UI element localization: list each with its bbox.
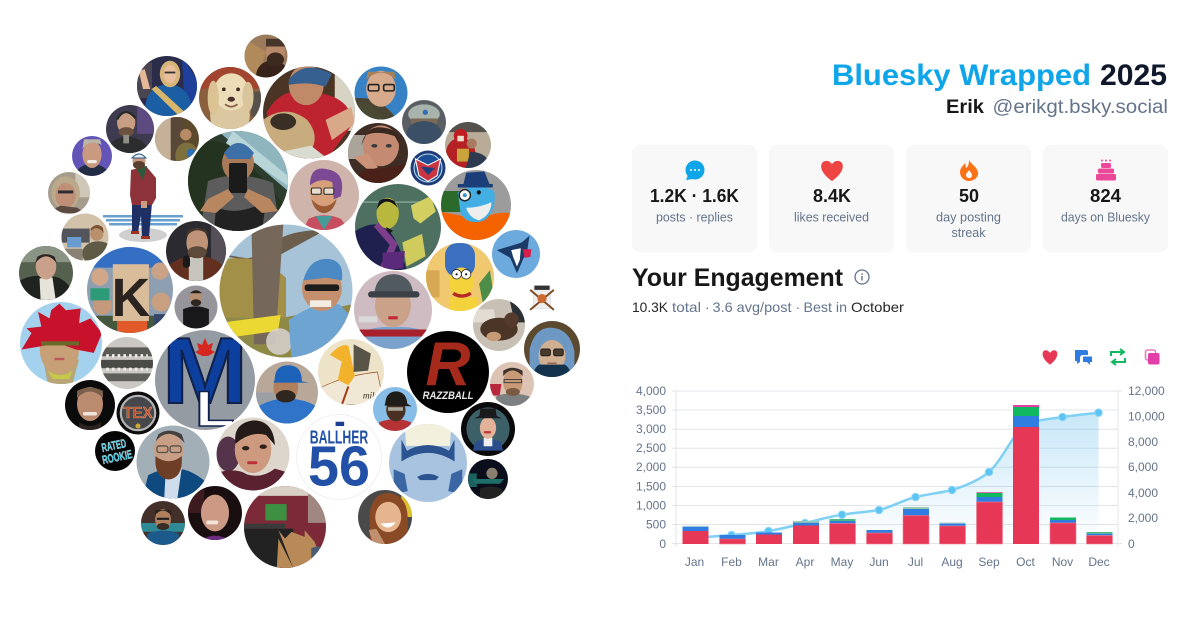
- engagement summary: October: [851, 299, 904, 315]
- avatar: Simpsons Mike baseball card: mike: [363, 390, 380, 400]
- right axis labels: 12,000: [1128, 384, 1165, 398]
- left axis labels: 2,500: [636, 441, 666, 455]
- avatar: Ballher 56 jersey: 56: [308, 435, 370, 498]
- avatar: Razzball logo: RAZZBALL: [423, 390, 473, 402]
- month labels: Dec: [1088, 555, 1110, 569]
- avatar: bald man smiling: [188, 486, 242, 540]
- avatar: woman with hand on cheek: [348, 123, 408, 183]
- avatar: dog watching TV: [244, 486, 326, 568]
- stat card: day posting streak: 50: [959, 186, 979, 206]
- avatar: TEX neon sign: [116, 392, 160, 434]
- heading: Your Engagement: Your Engagement: [632, 264, 844, 292]
- engagement summary: ·: [705, 299, 710, 315]
- avatar: man with cap by tree: [220, 224, 352, 358]
- avatar: man in dark suit: [19, 246, 73, 300]
- avatar: ML maple leaf logo: [155, 330, 255, 430]
- month labels: Mar: [758, 555, 779, 569]
- user name and handle: Erik: [946, 97, 984, 118]
- stat card: day posting streak: [906, 145, 1031, 252]
- avatar: woman with dark hair: [216, 418, 290, 490]
- icon: flame: [960, 160, 978, 181]
- cumulative points: [728, 409, 1102, 539]
- stat card: day posting streak: day posting: [936, 210, 1001, 224]
- engagement summary: ·: [796, 299, 800, 315]
- avatar: bearded man top: [244, 34, 288, 78]
- avatar: cartoon man with purple hair: [289, 160, 359, 230]
- right axis labels: 4,000: [1128, 486, 1158, 500]
- title: Bluesky Wrapped: [832, 59, 1091, 92]
- month labels: Oct: [1016, 555, 1035, 569]
- left axis labels: 0: [659, 537, 666, 551]
- cumulative line: [694, 413, 1098, 538]
- icon: info: [855, 270, 869, 284]
- month labels: Feb: [721, 555, 742, 569]
- avatar: dim portrait with hat: [468, 459, 508, 499]
- icon: chat bubble: [686, 160, 704, 180]
- right axis labels: 6,000: [1128, 460, 1158, 474]
- title: 2025: [1100, 59, 1167, 92]
- bar: Jul: [903, 507, 929, 544]
- avatar: K sign in baseball crowd: [87, 247, 173, 333]
- left axis labels: 2,000: [636, 460, 666, 474]
- right axis labels: 0: [1128, 537, 1135, 551]
- bar: Apr: [793, 521, 819, 544]
- avatar: Rated Rookie logo: [95, 431, 135, 471]
- left axis labels: 3,500: [636, 403, 666, 417]
- right axis labels: 8,000: [1128, 435, 1158, 449]
- month labels: Nov: [1052, 555, 1073, 569]
- avatar: man with glasses and grey sweater: [490, 362, 534, 406]
- grid lines and axes: [672, 391, 1122, 547]
- bar: Jan: [682, 526, 708, 544]
- avatar: Blue Jays logo: [492, 230, 540, 278]
- avatar: man with glasses: [354, 66, 408, 120]
- avatar: whale mascot with Blue Jays cap: [441, 170, 511, 240]
- icon: replies bubbles: [1075, 350, 1092, 365]
- icon: likes heart: [1043, 350, 1057, 365]
- avatar: man in red shirt with pug: [263, 65, 355, 158]
- avatar: K sign in baseball crowd: K: [112, 269, 150, 328]
- user name and handle: @erikgt.bsky.social: [992, 97, 1168, 118]
- avatar: Mary Poppins: [461, 402, 515, 456]
- avatar: man at microphone in brown jacket: [166, 221, 226, 281]
- engagement summary: 3.6 avg/post: [712, 299, 792, 315]
- month labels: Jan: [685, 555, 704, 569]
- avatar: smiling grey-haired man: [72, 136, 112, 176]
- avatar: man in black shirt on grey: [174, 286, 218, 328]
- right axis labels: 2,000: [1128, 511, 1158, 525]
- month labels: [685, 555, 1110, 569]
- illustration: cartoon man in red jacket standing on stripes: [103, 154, 183, 242]
- avatar: Rated Rookie logo: ROOKIE: [101, 447, 133, 467]
- icon: quote squares: [1146, 350, 1160, 364]
- avatar: cartoon woman with long hair: [358, 490, 412, 544]
- stat card: days on Bluesky: 824: [1090, 186, 1121, 206]
- stat card: posts and replies: [632, 145, 757, 252]
- month labels: Apr: [796, 555, 814, 569]
- stat card: posts and replies: posts · replies: [656, 210, 733, 224]
- avatar: masked person with cap: [402, 100, 446, 148]
- avatar: bearded man in blue suit: [136, 426, 210, 498]
- stat card: likes received: 8.4K: [813, 186, 851, 206]
- engagement summary: 10.3K: [632, 299, 669, 315]
- bar: May: [830, 519, 856, 544]
- left axis labels: [636, 384, 666, 551]
- avatar: ML maple leaf logo: L: [195, 381, 235, 437]
- avatar: Marge Simpson: [426, 243, 494, 311]
- avatar: man with glasses in blue scrubs: [141, 501, 185, 545]
- bar: Dec: [1086, 532, 1112, 544]
- avatar: dog on sofa: [473, 299, 525, 351]
- month labels: Aug: [941, 555, 963, 569]
- icon: heart: [821, 161, 843, 181]
- avatar: man with laptop: [62, 214, 108, 260]
- month labels: Jun: [869, 555, 889, 569]
- stat card: likes received: [769, 145, 894, 252]
- right axis labels: 10,000: [1128, 410, 1165, 424]
- icon: repost arrows: [1111, 349, 1125, 365]
- avatar: red mascot and person: [445, 122, 491, 169]
- bar: Mar: [756, 532, 782, 544]
- avatar: headset man: [106, 105, 154, 153]
- avatar bubble cluster: [19, 34, 580, 568]
- bar: Aug: [940, 522, 966, 544]
- stat card: posts and replies: 1.2K · 1.6K: [650, 186, 739, 206]
- bar: Oct: [1013, 405, 1039, 544]
- left axis labels: 4,000: [636, 384, 666, 398]
- right axis labels: [1128, 384, 1165, 551]
- avatar: Ballher 56 jersey: BALLHER: [310, 427, 368, 448]
- avatar: Rated Rookie logo: RATED: [100, 436, 128, 455]
- avatar: woman in blue jersey: [137, 56, 197, 116]
- avatar: TEX neon sign: TEX: [123, 405, 153, 422]
- avatar: bald man on black: [65, 380, 115, 430]
- avatar: white dog: [199, 67, 261, 129]
- avatar: man in camo jacket: [155, 117, 199, 161]
- cumulative area: [694, 413, 1098, 544]
- avatar: Razzball logo: R: [425, 330, 471, 399]
- avatar: ML maple leaf logo: M: [162, 318, 248, 423]
- avatar: green cartoon villain: [355, 184, 441, 270]
- stat card: likes received: likes received: [794, 210, 869, 224]
- month labels: Sep: [978, 555, 1000, 569]
- left axis labels: 1,000: [636, 498, 666, 512]
- avatar: hockey team logo: [410, 150, 446, 186]
- avatar: man with blue cap and hawaiian shirt: [256, 362, 318, 424]
- avatar: red Canadian maple leaf hat: [20, 302, 102, 384]
- avatar: woman with cap: [354, 271, 432, 349]
- engagement summary: total: [672, 299, 701, 315]
- left axis labels: 1,500: [636, 480, 666, 494]
- engagement summary: [632, 299, 904, 315]
- icon: birthday cake: [1096, 160, 1116, 180]
- stacked bars: [682, 405, 1112, 544]
- avatar: selfie man with phone: [188, 131, 288, 231]
- chart: engagement by month, stacked bars and cumulative line: [636, 384, 1165, 569]
- avatar: person in blue hood with glasses: [524, 321, 580, 377]
- engagement summary: Best in: [804, 299, 847, 315]
- avatar: moustache and hat silhouette: [389, 424, 467, 502]
- stat card: days on Bluesky: [1043, 145, 1168, 252]
- avatar: small crest with crossed bats: [530, 286, 554, 310]
- stat card: days on Bluesky: days on Bluesky: [1061, 210, 1151, 224]
- bar: Feb: [720, 535, 746, 544]
- left axis labels: 3,000: [636, 422, 666, 436]
- avatar: Ballher 56 jersey: [296, 414, 382, 500]
- avatar: Razzball logo: [407, 330, 489, 413]
- left axis labels: 500: [646, 518, 666, 532]
- avatar: older woman with glasses: [48, 172, 90, 214]
- avatar: Simpsons Mike baseball card: [318, 339, 384, 405]
- chart legend icons: [1043, 349, 1160, 365]
- avatar: black and white team photo: [101, 337, 153, 389]
- bar: Sep: [976, 492, 1002, 544]
- bar: Jun: [866, 530, 892, 544]
- stat card: day posting streak: streak: [952, 226, 986, 240]
- avatar: man with black cap and sunglasses: [373, 387, 417, 431]
- month labels: May: [831, 555, 853, 569]
- month labels: Jul: [908, 555, 923, 569]
- bar: Nov: [1050, 518, 1076, 544]
